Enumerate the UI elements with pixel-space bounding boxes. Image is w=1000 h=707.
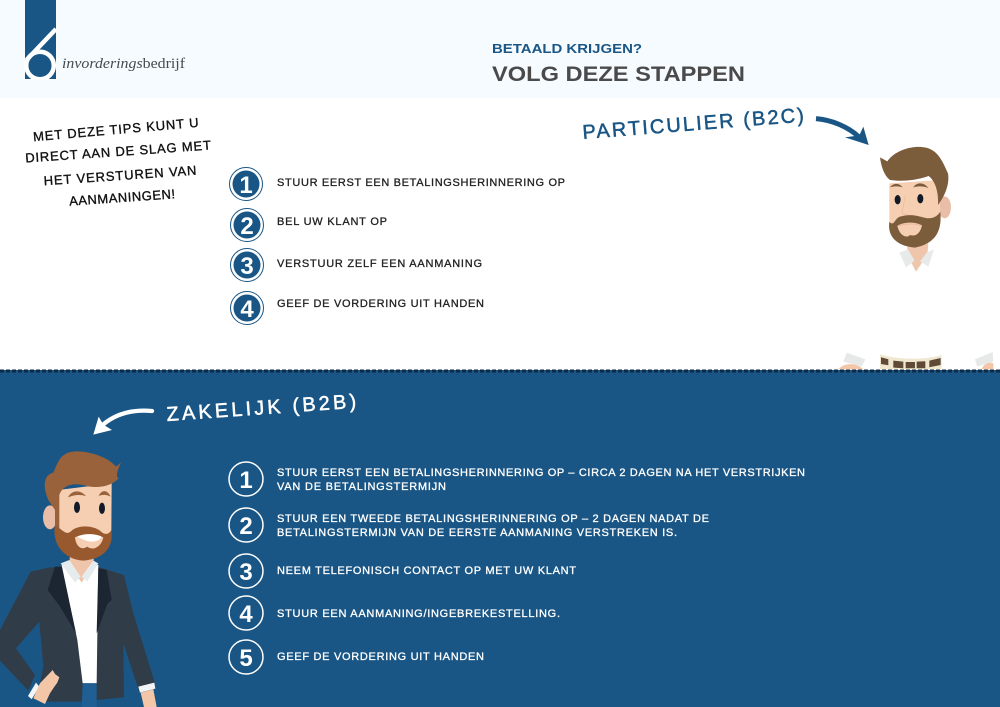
step 2 [229, 508, 709, 542]
step 3: NEEM TELEFONISCH CONTACT OP MET UW KLANT [277, 565, 576, 577]
step 5: 5 [239, 645, 253, 672]
step 5 [229, 640, 484, 674]
step 2: BETALINGSTERMIJN VAN DE EERSTE AANMANING VERSTREKEN IS. [277, 527, 677, 539]
step 3 [230, 248, 482, 282]
title [492, 41, 745, 86]
step 3: VERSTUUR ZELF EEN AANMANING [277, 258, 482, 270]
step 1: VAN DE BETALINGSTERMIJN [277, 481, 446, 493]
title: BETAALD KRIJGEN? [492, 41, 642, 56]
title: VOLG DEZE STAPPEN [492, 63, 745, 86]
intro note: HET VERSTUREN VAN [43, 163, 197, 188]
steps: zakelijk [229, 462, 805, 674]
step 1: STUUR EERST EEN BETALINGSHERINNERING OP [277, 177, 565, 189]
heading: zakelijk: ZAKELIJK (B2B) [166, 391, 357, 426]
step 4: 4 [240, 296, 254, 323]
step 1 [229, 462, 805, 496]
logo [20, 0, 185, 85]
steps: particulier [230, 168, 565, 324]
step 4: 4 [239, 601, 253, 628]
character: particulier man [880, 147, 951, 272]
head [43, 505, 57, 529]
shirt [62, 565, 98, 683]
character: particulier lower body [838, 352, 993, 369]
intro note: AANMANINGEN! [69, 186, 175, 209]
panel: zakelijk [0, 370, 1000, 707]
jacket [0, 567, 155, 702]
step 1: 1 [239, 172, 253, 199]
step 2: BEL UW KLANT OP [277, 216, 387, 228]
heading: particulier: PARTICULIER (B2C) [582, 105, 805, 144]
step 2 [230, 208, 387, 242]
intro note [25, 115, 211, 209]
arrow: particulier [816, 119, 869, 145]
step 4 [229, 596, 560, 630]
step 1: 1 [239, 467, 253, 494]
step 2: 2 [240, 213, 254, 240]
step 4: GEEF DE VORDERING UIT HANDEN [277, 298, 484, 310]
step 1: STUUR EERST EEN BETALINGSHERINNERING OP – CIRCA 2 DAGEN NA HET VERSTRIJKEN [277, 467, 805, 479]
character: zakelijk man [0, 451, 157, 707]
step 3: 3 [239, 559, 253, 586]
step 3 [229, 554, 576, 588]
intro note: MET DEZE TIPS KUNT U [32, 115, 199, 144]
logo: invorderings bedrijf [62, 56, 185, 72]
step 4: STUUR EEN AANMANING/INGEBREKESTELLING. [277, 608, 560, 620]
step 3: 3 [240, 253, 254, 280]
intro note: DIRECT AAN DE SLAG MET [25, 138, 211, 165]
step 1 [230, 168, 565, 200]
step 4 [230, 292, 484, 324]
step 2: 2 [239, 513, 253, 540]
step 2: STUUR EEN TWEEDE BETALINGSHERINNERING OP – 2 DAGEN NADAT DE [277, 513, 709, 525]
arrow: zakelijk [93, 411, 152, 435]
step 5: GEEF DE VORDERING UIT HANDEN [277, 651, 484, 663]
header band [0, 0, 1000, 98]
